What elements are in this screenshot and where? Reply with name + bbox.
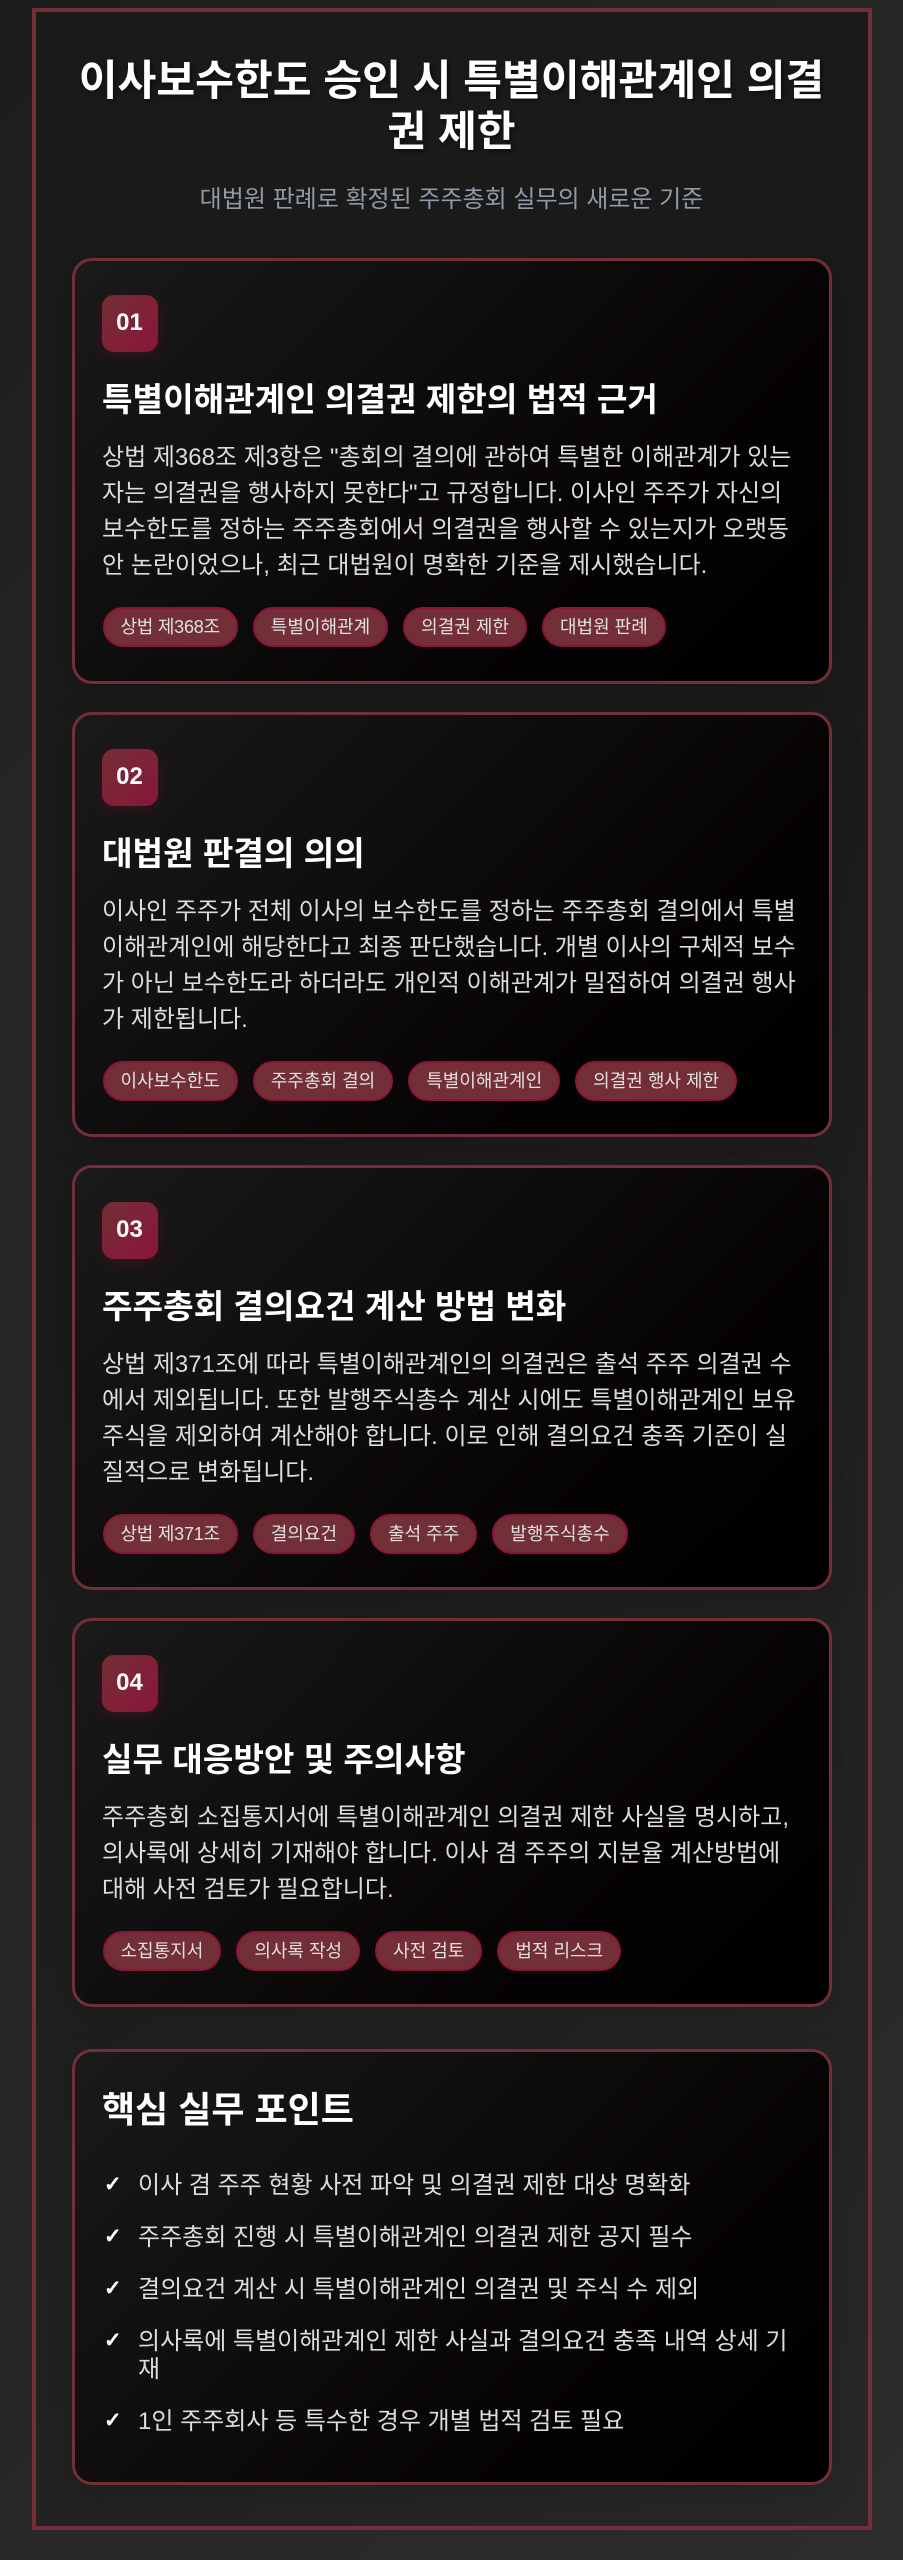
body text 02 <box>102 898 796 1033</box>
body text 02: 이해관계인에 해당한다고 최종 판단했습니다. 개별 이사의 구체적 보수 <box>102 934 796 961</box>
heading 02: 대법원 판결의 의의 <box>102 836 365 873</box>
tags 02: 주주총회 결의 <box>271 1071 375 1091</box>
tags 03: 상법 제371조 <box>120 1524 220 1544</box>
panel: section 03 resolution calculation <box>72 1165 832 1590</box>
tags 02: 의결권 행사 제한 <box>593 1071 719 1091</box>
subtitle: 대법원 판례로 확정된 주주총회 실무의 새로운 기준 <box>200 186 703 213</box>
body text 01: 상법 제368조 제3항은 "총회의 결의에 관하여 특별한 이해관계가 있는 <box>102 444 791 471</box>
tags 03: 결의요건 <box>271 1524 337 1544</box>
body text 04: 의사록에 상세히 기재해야 합니다. 이사 겸 주주의 지분율 계산방법에 <box>102 1840 780 1867</box>
checklist item 2: 주주총회 진행 시 특별이해관계인 의결권 제한 공지 필수 <box>138 2224 693 2250</box>
number badge 01 <box>102 295 158 352</box>
tags 01 <box>103 607 666 647</box>
body text 03: 에서 제외됩니다. 또한 발행주식총수 계산 시에도 특별이해관계인 보유 <box>102 1387 796 1414</box>
checklist item 1: ✓ <box>104 2172 122 2196</box>
number badge 03: 03 <box>116 1216 143 1243</box>
panel: section 01 legal basis <box>72 258 832 684</box>
body text 04 <box>102 1804 789 1903</box>
tags 04: 소집통지서 <box>120 1941 203 1961</box>
tags 02: 이사보수한도 <box>120 1071 220 1091</box>
title <box>79 57 824 155</box>
tags 04: 법적 리스크 <box>515 1941 603 1961</box>
body text 01 <box>102 444 791 579</box>
body text 04: 주주총회 소집통지서에 특별이해관계인 의결권 제한 사실을 명시하고, <box>102 1804 789 1831</box>
checklist item 2: ✓ <box>104 2224 122 2248</box>
tags 03: 발행주식총수 <box>510 1524 610 1544</box>
tags 03: 출석 주주 <box>388 1524 459 1544</box>
title: 이사보수한도 승인 시 특별이해관계인 의결 <box>79 57 824 104</box>
heading 03: 주주총회 결의요건 계산 방법 변화 <box>102 1289 566 1326</box>
number badge 02 <box>102 749 158 806</box>
body text 02: 가 아닌 보수한도라 하더라도 개인적 이해관계가 밀접하여 의결권 행사 <box>102 970 796 997</box>
body text 02: 이사인 주주가 전체 이사의 보수한도를 정하는 주주총회 결의에서 특별 <box>102 898 796 925</box>
number badge 04: 04 <box>116 1669 143 1696</box>
tags 01: 대법원 판례 <box>560 617 648 637</box>
body text 01: 안 논란이었으나, 최근 대법원이 명확한 기준을 제시했습니다. <box>102 552 707 579</box>
checklist item 5: ✓ <box>104 2408 122 2432</box>
heading 04: 실무 대응방안 및 주의사항 <box>102 1742 466 1779</box>
checklist item 4 <box>104 2328 788 2383</box>
number badge 04 <box>102 1655 158 1712</box>
checklist item 4: 의사록에 특별이해관계인 제한 사실과 결의요건 충족 내역 상세 기 <box>138 2328 788 2354</box>
number badge 02: 02 <box>116 763 143 790</box>
panel: section 04 practical response <box>72 1618 832 2007</box>
tags 04 <box>103 1931 621 1971</box>
body text 03: 질적으로 변화됩니다. <box>102 1459 314 1486</box>
body text 03: 주식을 제외하여 계산해야 합니다. 이로 인해 결의요건 충족 기준이 실 <box>102 1423 787 1450</box>
checklist item 3: ✓ <box>104 2276 122 2300</box>
checklist item 3: 결의요건 계산 시 특별이해관계인 의결권 및 주식 수 제외 <box>138 2276 699 2302</box>
tags 04: 사전 검토 <box>393 1941 464 1961</box>
body text 02: 가 제한됩니다. <box>102 1006 248 1033</box>
number badge 01: 01 <box>116 309 143 336</box>
checklist item 5: 1인 주주회사 등 특수한 경우 개별 법적 검토 필요 <box>138 2408 624 2435</box>
tags 02: 특별이해관계인 <box>426 1071 542 1091</box>
checklist item 4: 재 <box>138 2356 160 2383</box>
tags 01: 특별이해관계 <box>271 617 370 637</box>
number badge 03 <box>102 1202 158 1259</box>
checklist item 1: 이사 겸 주주 현황 사전 파악 및 의결권 제한 대상 명확화 <box>138 2172 690 2199</box>
body text 01: 보수한도를 정하는 주주총회에서 의결권을 행사할 수 있는지가 오랫동 <box>102 516 789 543</box>
tags 04: 의사록 작성 <box>254 1941 342 1961</box>
body text 01: 자는 의결권을 행사하지 못한다"고 규정합니다. 이사인 주주가 자신의 <box>102 480 782 507</box>
tags 01: 의결권 제한 <box>421 617 509 637</box>
heading 01: 특별이해관계인 의결권 제한의 법적 근거 <box>102 382 658 419</box>
summary heading: 핵심 실무 포인트 <box>102 2089 354 2130</box>
body text 04: 대해 사전 검토가 필요합니다. <box>102 1876 394 1903</box>
tags 03 <box>103 1514 628 1554</box>
panel: key practical points <box>72 2049 832 2485</box>
body text 03: 상법 제371조에 따라 특별이해관계인의 의결권은 출석 주주 의결권 수 <box>102 1351 792 1378</box>
title: 권 제한 <box>387 108 516 155</box>
panel: section 02 supreme court ruling <box>72 712 832 1137</box>
body text 03 <box>102 1351 796 1486</box>
checklist item 4: ✓ <box>104 2328 122 2352</box>
tags 02 <box>103 1061 737 1101</box>
tags 01: 상법 제368조 <box>120 617 220 637</box>
